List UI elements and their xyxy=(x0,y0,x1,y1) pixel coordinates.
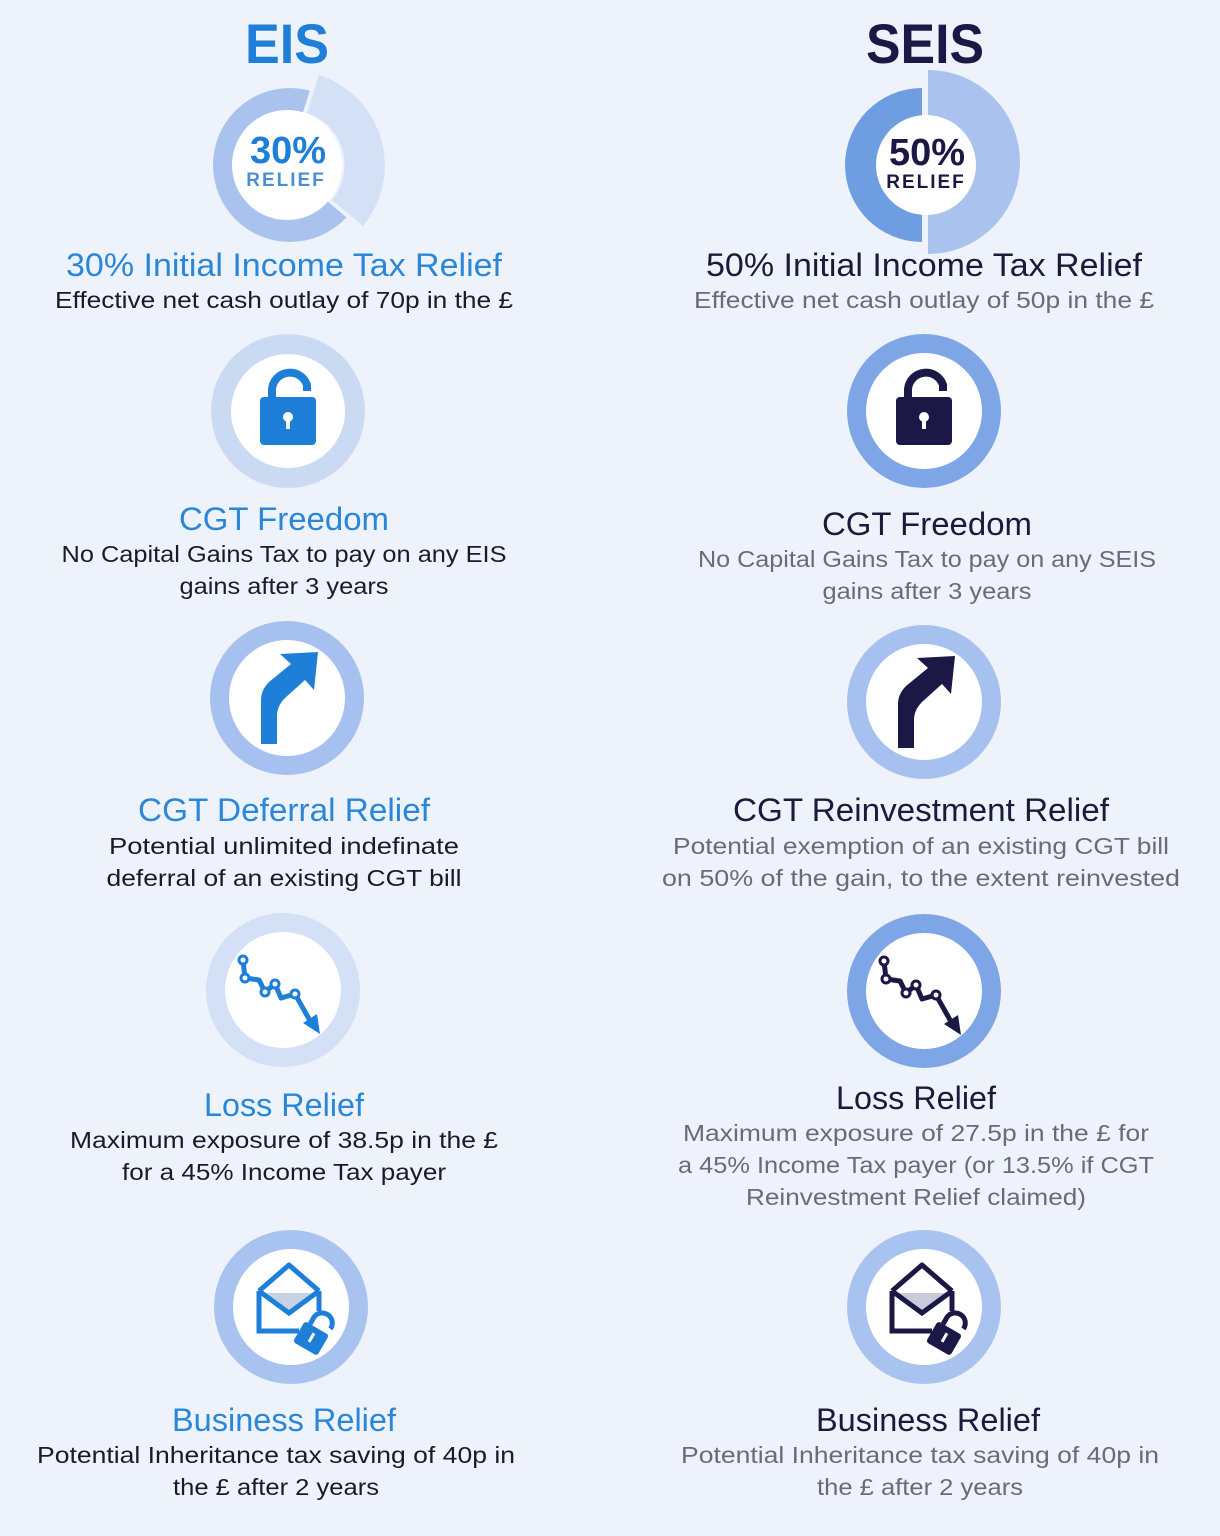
text: SEIS initial relief xyxy=(694,247,1154,313)
title: EIS: EIS xyxy=(245,12,329,75)
icon: SEIS envelope lock xyxy=(847,1230,1001,1384)
text: EIS CGT freedom: No Capital Gains Tax to pay on any EIS xyxy=(62,541,506,567)
chart: EIS 30% donut: RELIEF xyxy=(246,170,326,191)
text: SEIS business relief: Business Relief xyxy=(816,1402,1040,1438)
text: EIS loss relief xyxy=(70,1087,498,1185)
icon: SEIS arrow xyxy=(847,625,1001,779)
icon: SEIS loss chart xyxy=(847,914,1001,1068)
text: SEIS CGT freedom xyxy=(698,506,1156,604)
text: SEIS business relief: Potential Inheritance tax saving of 40p in xyxy=(681,1442,1159,1468)
text: SEIS business relief: the £ after 2 years xyxy=(817,1474,1023,1500)
text: EIS CGT deferral: Potential unlimited indefinate xyxy=(109,833,459,859)
text: SEIS initial relief: Effective net cash outlay of 50p in the £ xyxy=(694,287,1154,313)
text: EIS CGT freedom xyxy=(62,501,506,599)
text: SEIS CGT freedom: No Capital Gains Tax to pay on any SEIS xyxy=(698,546,1156,572)
text: EIS loss relief: Maximum exposure of 38.5p in the £ xyxy=(70,1127,498,1153)
text: SEIS CGT reinvestment: Potential exemption of an existing CGT bill xyxy=(673,833,1169,859)
icon: EIS lock xyxy=(211,334,365,488)
text: EIS CGT deferral xyxy=(106,792,462,891)
text: SEIS loss relief: Loss Relief xyxy=(836,1080,996,1116)
text: EIS CGT deferral: deferral of an existing CGT bill xyxy=(106,865,462,891)
icon: SEIS lock xyxy=(847,334,1001,488)
icon: EIS arrow xyxy=(210,621,364,775)
text: SEIS CGT freedom: gains after 3 years xyxy=(822,578,1032,604)
text: EIS CGT freedom: CGT Freedom xyxy=(179,501,389,537)
text: EIS CGT freedom: gains after 3 years xyxy=(180,573,388,599)
text: SEIS CGT freedom: CGT Freedom xyxy=(822,506,1032,542)
chart: SEIS 50% donut: RELIEF xyxy=(886,172,966,193)
chart: SEIS 50% donut xyxy=(845,70,1020,254)
text: SEIS initial relief: 50% Initial Income Tax Relief xyxy=(706,247,1142,283)
text: EIS loss relief: for a 45% Income Tax payer xyxy=(122,1159,446,1185)
text: SEIS business relief xyxy=(681,1402,1159,1500)
text: EIS business relief: Business Relief xyxy=(172,1402,396,1438)
text: SEIS CGT reinvestment: CGT Reinvestment Relief xyxy=(733,792,1109,828)
chart: EIS 30% donut xyxy=(213,75,385,242)
text: EIS loss relief: Loss Relief xyxy=(204,1087,364,1123)
text: EIS CGT deferral: CGT Deferral Relief xyxy=(138,792,430,828)
text: SEIS loss relief xyxy=(678,1080,1154,1210)
text: EIS initial relief xyxy=(55,247,513,313)
icon: EIS envelope lock xyxy=(214,1230,368,1384)
chart: EIS 30% donut: 30% xyxy=(250,130,326,172)
text: EIS business relief: Potential Inheritance tax saving of 40p in xyxy=(37,1442,515,1468)
text: SEIS loss relief: a 45% Income Tax payer (or 13.5% if CGT xyxy=(678,1152,1154,1178)
text: SEIS CGT reinvestment xyxy=(662,792,1180,891)
text: EIS initial relief: 30% Initial Income Tax Relief xyxy=(66,247,502,283)
text: EIS initial relief: Effective net cash outlay of 70p in the £ xyxy=(55,287,513,313)
text: SEIS loss relief: Maximum exposure of 27.5p in the £ for xyxy=(683,1120,1149,1146)
icon: EIS loss chart xyxy=(206,913,360,1067)
text: EIS business relief xyxy=(37,1402,515,1500)
text: EIS business relief: the £ after 2 years xyxy=(173,1474,379,1500)
text: SEIS CGT reinvestment: on 50% of the gain, to the extent reinvested xyxy=(662,865,1180,891)
text: SEIS loss relief: Reinvestment Relief claimed) xyxy=(746,1184,1086,1210)
title: SEIS: SEIS xyxy=(866,12,984,75)
chart: SEIS 50% donut: 50% xyxy=(889,132,965,174)
